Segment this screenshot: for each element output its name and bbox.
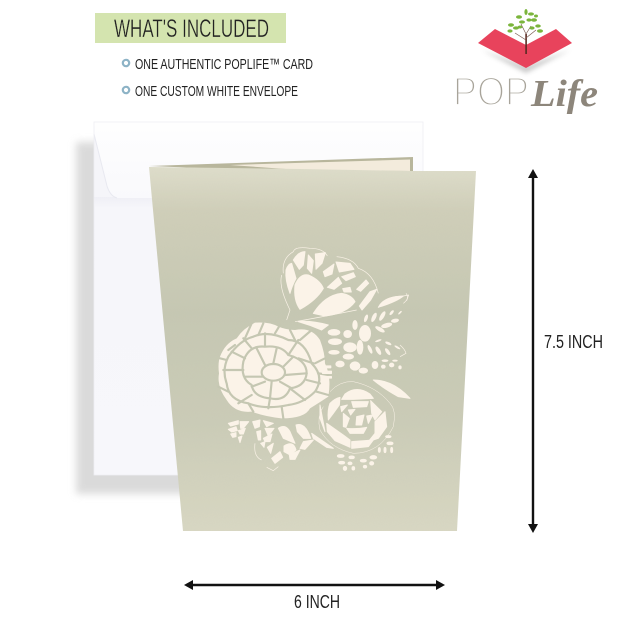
logo chevron book bbox=[478, 29, 572, 73]
heading: what's included bbox=[95, 13, 286, 43]
top flower outline bbox=[281, 248, 409, 322]
card front bbox=[149, 167, 476, 531]
logo wordmark: POP bbox=[453, 70, 529, 114]
die-cut flower artwork bbox=[218, 248, 410, 471]
lower left petals and sprigs bbox=[228, 420, 313, 471]
logo tree bbox=[507, 9, 543, 54]
item: white envelope bbox=[123, 83, 298, 100]
card back panel bbox=[149, 157, 413, 172]
left bloom bbox=[218, 322, 329, 418]
logo wordmark: Life bbox=[530, 73, 598, 115]
arrow: height bbox=[528, 169, 538, 533]
logo wordmark bbox=[453, 70, 598, 115]
envelope flap bbox=[94, 122, 423, 198]
card bbox=[149, 157, 476, 531]
heading: what's included: WHAT'S INCLUDED bbox=[114, 15, 269, 43]
rose bbox=[312, 380, 410, 470]
logo: PopLife bbox=[453, 9, 598, 115]
item: white envelope: ONE CUSTOM WHITE ENVELOPE bbox=[135, 83, 298, 100]
arrow: width bbox=[184, 580, 445, 590]
rose leaves bbox=[386, 436, 391, 438]
right bouquet cluster bbox=[322, 293, 407, 379]
bouquet leaves bbox=[363, 314, 369, 323]
top flower bbox=[281, 248, 409, 330]
label: 7.5 inch: 7.5 INCH bbox=[544, 332, 603, 352]
item: authentic card bbox=[123, 56, 313, 73]
item: authentic card: ONE AUTHENTIC POPLIFE™ CARD bbox=[135, 56, 313, 73]
envelope shadow bbox=[76, 142, 200, 494]
label: 6 inch: 6 INCH bbox=[294, 592, 340, 612]
envelope bbox=[94, 122, 423, 475]
list: included items bbox=[123, 56, 313, 100]
bloom veins bbox=[218, 323, 328, 418]
